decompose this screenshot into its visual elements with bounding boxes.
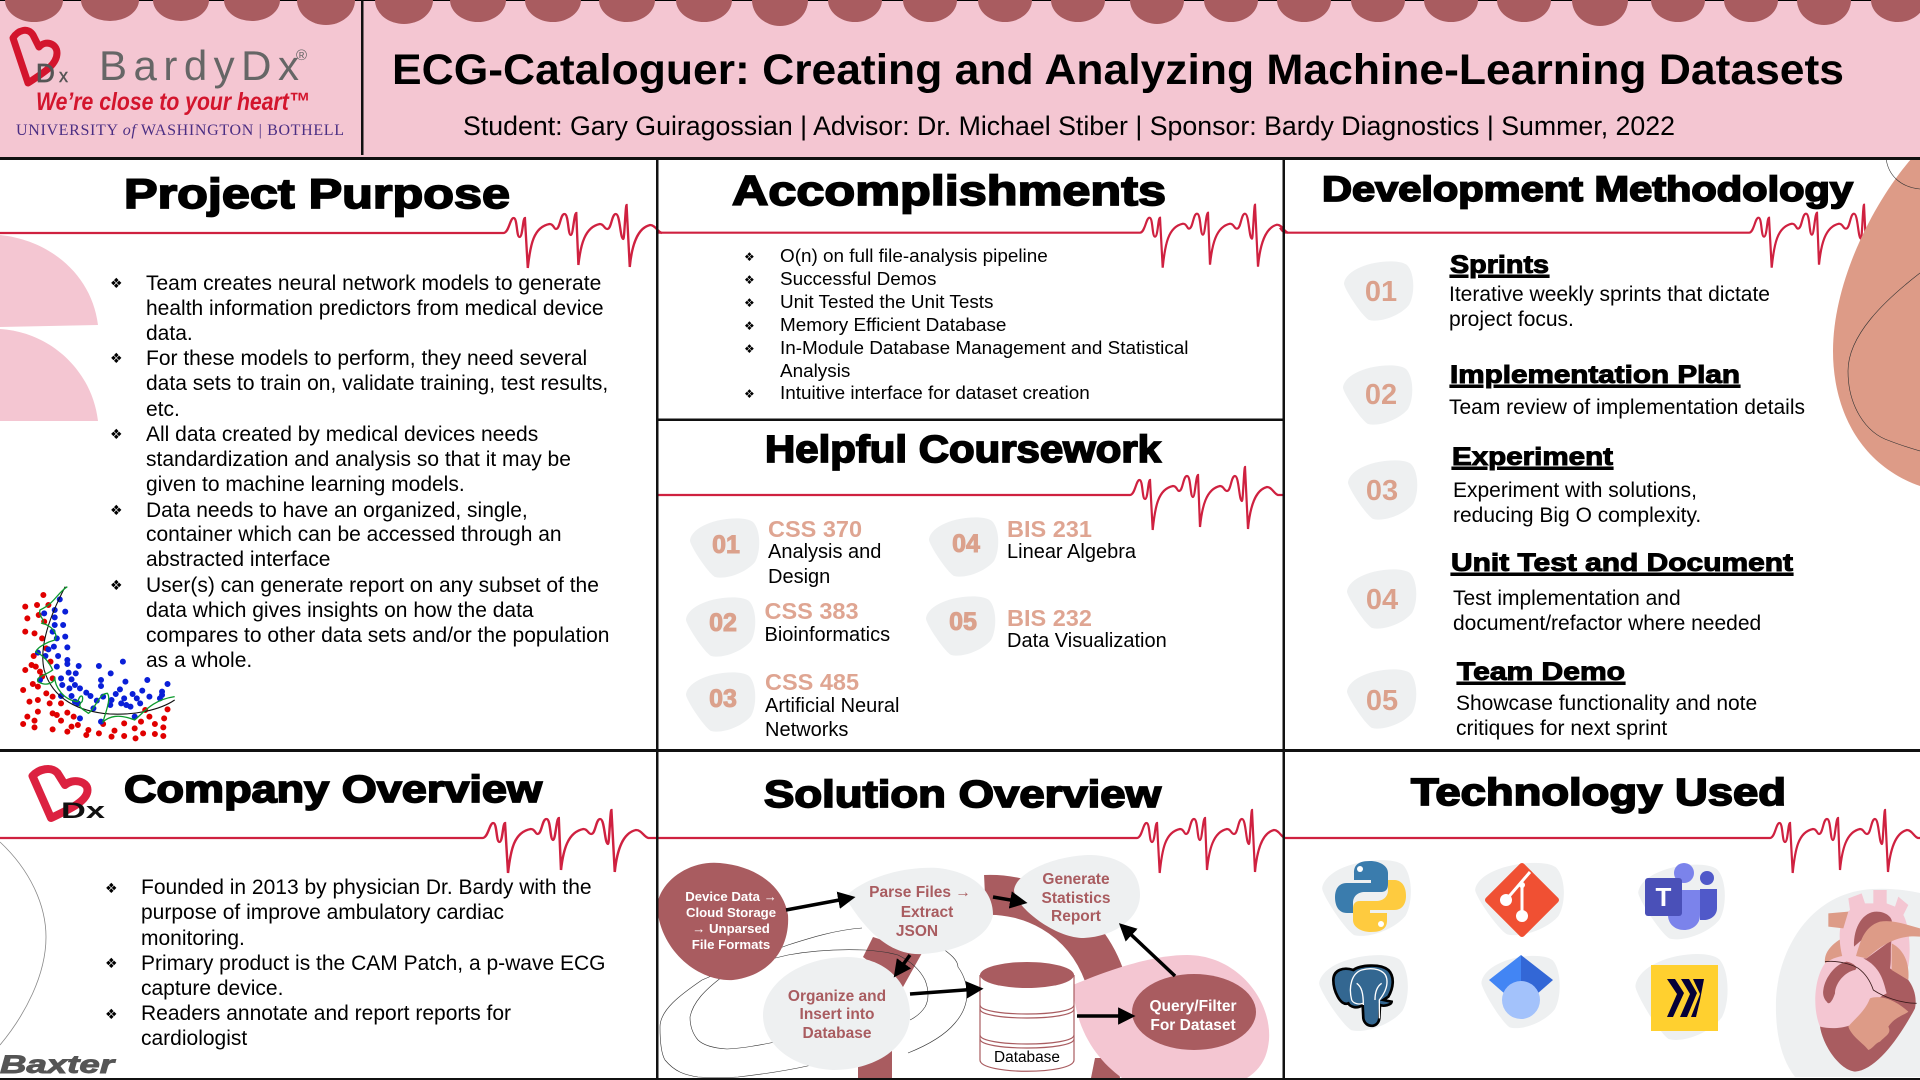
- purpose bullet list: data which gives insights on how the data: [146, 599, 534, 622]
- course: CSS 370: [690, 516, 881, 588]
- icon: heart logo: [13, 30, 57, 83]
- node: device data: File Formats: [692, 937, 770, 952]
- icon: miro: [1635, 954, 1728, 1040]
- course: BIS 231: 04: [952, 530, 980, 558]
- purpose bullet list: as a whole.: [146, 649, 252, 672]
- course: BIS 231: Linear Algebra: [1007, 541, 1137, 563]
- ECG divider: [657, 467, 1284, 530]
- step 02: implementation plan: Team review of implementation details: [1449, 396, 1805, 419]
- course: CSS 485: CSS 485: [765, 669, 859, 695]
- step 04: unit test and document: 04: [1366, 584, 1398, 616]
- arrow: organize to database: [910, 989, 978, 994]
- decorative thin swirl: [660, 928, 862, 1078]
- purpose bullet list: standardization and analysis so that it may be: [146, 448, 571, 471]
- course: CSS 383: [686, 597, 890, 657]
- Baxter logo: Baxter: [0, 1051, 116, 1079]
- arrow: query to report: [1123, 927, 1175, 976]
- logo: BardyDx: x: [59, 66, 68, 86]
- purpose bullet list: data sets to train on, validate training, test results,: [146, 372, 608, 395]
- step 03: experiment: 03: [1366, 475, 1398, 507]
- node: organize and insert: Insert into: [800, 1006, 874, 1023]
- course: BIS 232: 05: [949, 608, 977, 636]
- pink highlight shape: [1073, 955, 1269, 1078]
- panel: helpful coursework: [657, 429, 1284, 741]
- purpose bullet list: [110, 272, 609, 672]
- ECG divider: [0, 205, 662, 268]
- heading: Project Purpose: [124, 170, 510, 217]
- step 01: sprints: project focus.: [1449, 308, 1574, 331]
- step 05: team demo: Team Demo: [1457, 658, 1625, 686]
- node: device data: Device Data →: [685, 889, 777, 904]
- company bullet list: ❖: [105, 881, 118, 897]
- course: BIS 232: BIS 232: [1007, 605, 1092, 631]
- course: CSS 370: 01: [712, 531, 740, 559]
- logo: BardyDx: [13, 30, 344, 139]
- node: parse files: [845, 868, 993, 954]
- node: organize and insert: Database: [803, 1025, 872, 1042]
- step 04: unit test and document: Test implementation and: [1453, 587, 1681, 610]
- panel: solution overview: [657, 774, 1285, 1078]
- ECG divider: [1284, 810, 1920, 873]
- step 03: experiment: [1348, 443, 1701, 527]
- step 04: unit test and document: document/refactor where needed: [1453, 612, 1761, 635]
- purpose bullet list: etc.: [146, 398, 180, 421]
- company bullet list: ❖: [105, 1007, 118, 1023]
- panel: project purpose: [0, 170, 662, 738]
- purpose bullet list: User(s) can generate report on any subset of the: [146, 574, 599, 597]
- course: CSS 485: Artificial Neural: [765, 695, 899, 717]
- icon: blue graduation cap: [1481, 955, 1560, 1028]
- accomplishments bullet list: ❖: [744, 296, 755, 310]
- step 01: sprints: [1344, 251, 1770, 331]
- node: query filter: For Dataset: [1150, 1017, 1236, 1034]
- ECG divider: [657, 810, 1285, 873]
- heading: Development Methodology: [1322, 170, 1854, 209]
- accomplishments bullet list: ❖: [744, 342, 755, 356]
- node: device data: [657, 863, 788, 980]
- node: query filter: Query/Filter: [1150, 998, 1236, 1015]
- heading: Technology Used: [1411, 772, 1786, 814]
- step 05: team demo: critiques for next sprint: [1456, 717, 1667, 740]
- node: generate statistics report: Report: [1051, 908, 1101, 925]
- logo: BardyDx: BardyDx: [99, 42, 299, 89]
- purpose bullet list: abstracted interface: [146, 548, 330, 571]
- course: CSS 383: CSS 383: [764, 598, 859, 624]
- company bullet list: cardiologist: [141, 1027, 247, 1050]
- step 03: experiment: reducing Big O complexity.: [1453, 504, 1701, 527]
- step 04: unit test and document: Unit Test and Document: [1451, 549, 1794, 577]
- step 03: experiment: Experiment: [1452, 443, 1614, 471]
- decorative thin arc: [0, 842, 46, 1045]
- node: generate statistics report: Generate: [1042, 871, 1110, 888]
- scatter chart: classification overfitting: [23, 587, 175, 738]
- purpose bullet list: ❖: [110, 351, 123, 367]
- accomplishments bullet list: Analysis: [780, 361, 850, 382]
- purpose bullet list: container which can be accessed through an: [146, 523, 562, 546]
- accomplishments bullet list: ❖: [744, 387, 755, 401]
- node: parse files: JSON: [896, 923, 938, 940]
- node: generate statistics report: [1014, 855, 1140, 938]
- course: CSS 383: Bioinformatics: [764, 624, 890, 646]
- heading: Solution Overview: [764, 774, 1162, 816]
- icon: postgresql: [1319, 955, 1408, 1031]
- icon: company logo: [32, 769, 106, 823]
- purpose bullet list: ❖: [110, 578, 123, 594]
- course: CSS 485: 03: [709, 685, 737, 713]
- illustration: anatomical heart: [1776, 889, 1920, 1077]
- icon: microsoft teams: [1638, 863, 1725, 939]
- company bullet list: Primary product is the CAM Patch, a p-wave ECG: [141, 952, 606, 975]
- company bullet list: [105, 876, 606, 1050]
- arrow: device to parse: [786, 898, 850, 910]
- course: CSS 370: Design: [768, 566, 830, 588]
- panel: development methodology: [1280, 158, 1920, 740]
- step 04: unit test and document: [1347, 549, 1794, 635]
- node: device data: → Unparsed: [692, 921, 770, 936]
- node: parse files: Extract: [901, 904, 953, 921]
- purpose bullet list: All data created by medical devices needs: [146, 423, 538, 446]
- header banner: [0, 0, 1920, 158]
- node: query filter: [1132, 974, 1256, 1050]
- node: organize and insert: [763, 957, 910, 1070]
- company bullet list: capture device.: [141, 977, 283, 1000]
- node: device data: Cloud Storage: [686, 905, 776, 920]
- arrow: parse to organize: [897, 955, 910, 973]
- step 02: implementation plan: Implementation Plan: [1450, 361, 1740, 389]
- subtitle: Student: Gary Guiragossian | Advisor: Dr. Michael Stiber | Sponsor: Bardy Diagnostics | Summer, 2022: [463, 111, 1675, 141]
- step 05: team demo: [1347, 658, 1757, 740]
- node: generate statistics report: Statistics: [1042, 890, 1110, 907]
- title: ECG-Cataloguer: Creating and Analyzing Machine-Learning Datasets: [392, 46, 1844, 94]
- purpose bullet list: Data needs to have an organized, single,: [146, 499, 528, 522]
- purpose bullet list: Team creates neural network models to generate: [146, 272, 601, 295]
- icon: git: [1475, 863, 1564, 935]
- purpose bullet list: compares to other data sets and/or the population: [146, 624, 609, 647]
- accomplishments bullet list: Unit Tested the Unit Tests: [780, 292, 994, 313]
- panel: company overview: [0, 769, 656, 1079]
- course: BIS 231: [929, 516, 1137, 577]
- decorative pink shapes: [0, 235, 98, 421]
- course: CSS 370: Analysis and: [768, 541, 881, 563]
- accomplishments bullet list: Successful Demos: [780, 269, 936, 290]
- purpose bullet list: data.: [146, 322, 193, 345]
- accomplishments bullet list: [744, 246, 1188, 404]
- course: BIS 232: Data Visualization: [1007, 630, 1167, 652]
- accomplishments bullet list: ❖: [744, 319, 755, 333]
- step 01: sprints: Sprints: [1450, 251, 1549, 279]
- accomplishments bullet list: In-Module Database Management and Statistical: [780, 338, 1188, 359]
- ECG divider: [0, 810, 656, 873]
- flow diagram: [657, 855, 1269, 1078]
- step 02: implementation plan: [1343, 361, 1805, 425]
- decorative salmon shape: [1833, 158, 1920, 486]
- purpose bullet list: given to machine learning models.: [146, 473, 465, 496]
- arrow: database to query: [1077, 1014, 1130, 1018]
- database cylinder: Database: [994, 1049, 1060, 1066]
- ECG divider: [657, 205, 1288, 268]
- step 01: sprints: Iterative weekly sprints that dictate: [1449, 283, 1770, 306]
- purpose bullet list: ❖: [110, 276, 123, 292]
- step 05: team demo: 05: [1366, 685, 1398, 717]
- heading: Company Overview: [124, 769, 543, 811]
- heading: Helpful Coursework: [765, 429, 1162, 471]
- purpose bullet list: ❖: [110, 427, 123, 443]
- logo: BardyDx: We’re close to your heart™: [36, 88, 310, 116]
- company bullet list: monitoring.: [141, 927, 245, 950]
- accomplishments bullet list: Memory Efficient Database: [780, 315, 1006, 336]
- arrow: parse to report: [993, 897, 1022, 902]
- company bullet list: purpose of improve ambulatory cardiac: [141, 901, 504, 924]
- heading: Accomplishments: [732, 167, 1166, 214]
- purpose bullet list: ❖: [110, 503, 123, 519]
- company bullet list: ❖: [105, 956, 118, 972]
- company bullet list: Readers annotate and report reports for: [141, 1002, 511, 1025]
- step 03: experiment: Experiment with solutions,: [1453, 479, 1697, 502]
- step 05: team demo: Showcase functionality and note: [1456, 692, 1757, 715]
- icon: microsoft teams: T: [1656, 882, 1672, 912]
- step 02: implementation plan: 02: [1365, 379, 1397, 411]
- course: CSS 383: 02: [709, 609, 737, 637]
- course: BIS 232: [926, 596, 1167, 656]
- course: CSS 485: [686, 669, 899, 741]
- course: CSS 485: Networks: [765, 719, 848, 741]
- accomplishments bullet list: ❖: [744, 250, 755, 264]
- decorative ring bands: [858, 895, 1120, 1078]
- purpose bullet list: For these models to perform, they need several: [146, 347, 587, 370]
- accomplishments bullet list: ❖: [744, 273, 755, 287]
- ECG divider: [1280, 205, 1867, 268]
- icon: python: [1322, 860, 1411, 936]
- panel: technology used: [1284, 772, 1920, 1077]
- accomplishments bullet list: Intuitive interface for dataset creation: [780, 383, 1090, 404]
- database cylinder: [980, 962, 1074, 1071]
- node: organize and insert: Organize and: [788, 988, 886, 1005]
- course: BIS 231: BIS 231: [1007, 516, 1092, 542]
- logo: BardyDx: ®: [296, 47, 307, 64]
- course: CSS 370: CSS 370: [768, 516, 862, 542]
- node: parse files: Parse Files →: [869, 884, 971, 901]
- logo: BardyDx: D: [36, 58, 55, 88]
- purpose bullet list: health information predictors from medical device: [146, 297, 604, 320]
- scalloped top decoration: [5, 0, 1920, 26]
- icon: company logo: Dx: [61, 798, 106, 823]
- panel: accomplishments: [657, 167, 1288, 404]
- company bullet list: Founded in 2013 by physician Dr. Bardy with the: [141, 876, 592, 899]
- logo: BardyDx: UNIVERSITY of WASHINGTON | BOTHELL: [16, 122, 344, 139]
- step 01: sprints: 01: [1365, 276, 1397, 308]
- accomplishments bullet list: O(n) on full file-analysis pipeline: [780, 246, 1048, 267]
